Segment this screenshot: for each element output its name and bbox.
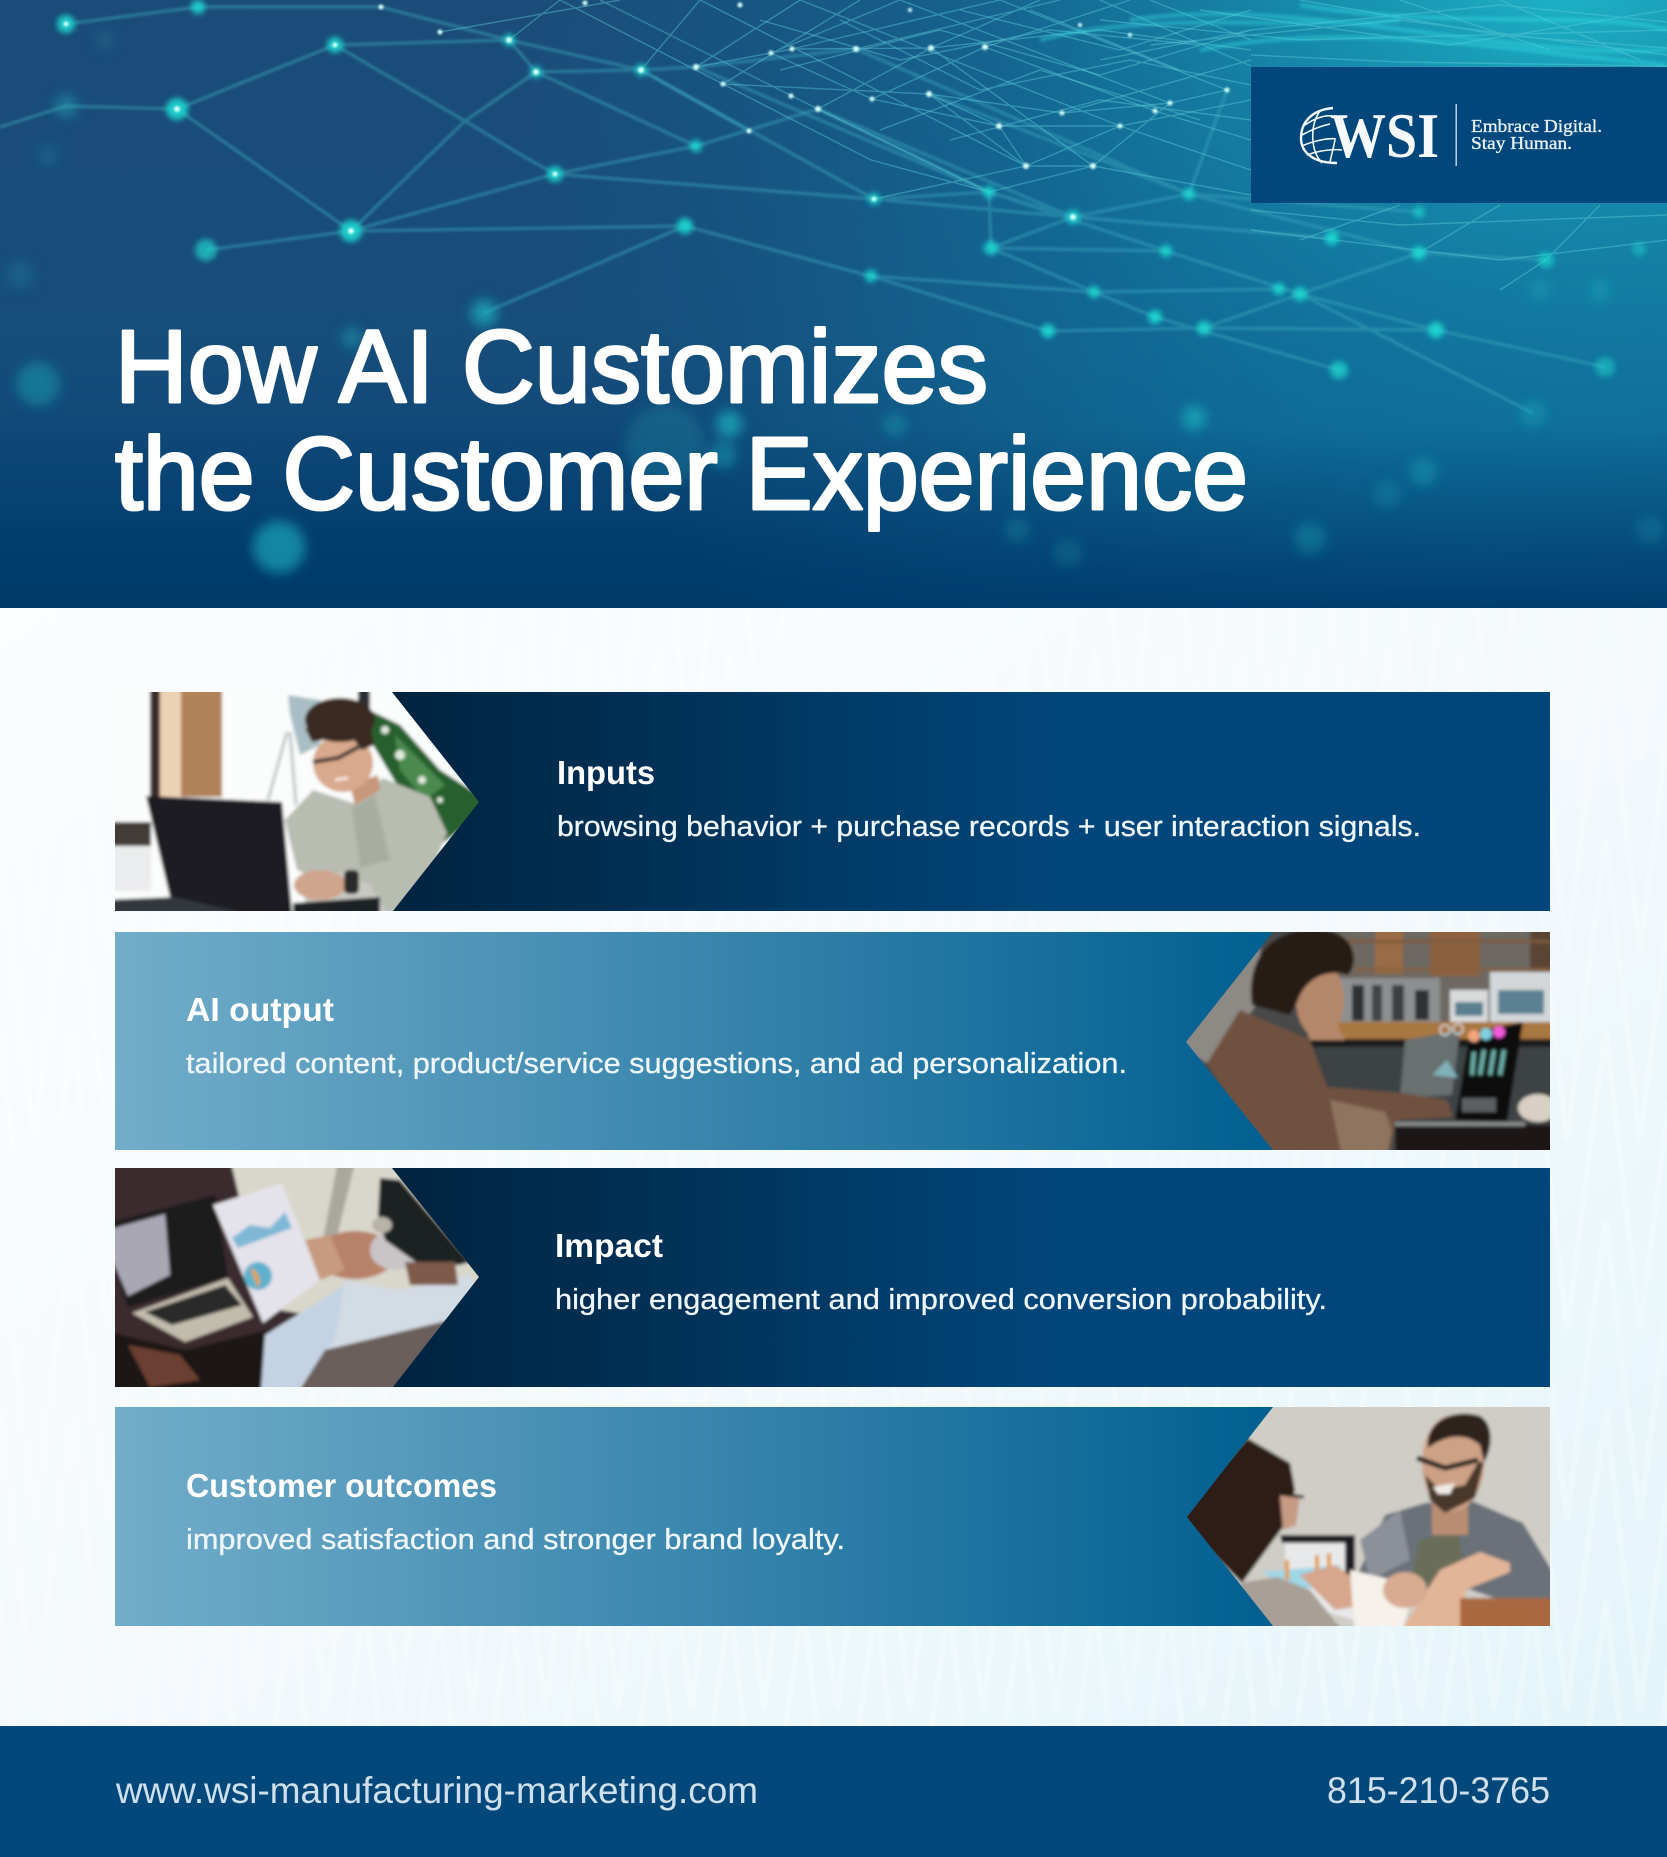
- panel: impact: [95, 1150, 1550, 1405]
- tagline: Embrace Digital.: [1471, 116, 1602, 136]
- heading: Inputs: [557, 754, 655, 791]
- photo: man with data dashboard: [1186, 932, 1550, 1150]
- blurred bokeh nodes: [6, 30, 1664, 573]
- phone: 815-210-3765: [1327, 1770, 1550, 1811]
- title: [115, 309, 1248, 531]
- website: www.wsi-manufacturing-marketing.com: [115, 1770, 758, 1811]
- footer: [0, 1726, 1667, 1857]
- heading: Impact: [555, 1227, 663, 1264]
- body text: improved satisfaction and stronger brand loyalty.: [186, 1524, 845, 1556]
- photo: man at laptop: [115, 692, 479, 911]
- photo: man on phone with report: [115, 1168, 479, 1387]
- header banner with network background: [0, 0, 1667, 608]
- panel: customer outcomes: [115, 1390, 1570, 1645]
- logo box: Stay Human.: [1471, 133, 1572, 153]
- fine mesh: [440, 0, 1667, 290]
- body text: higher engagement and improved conversion probability.: [555, 1284, 1327, 1316]
- title: How AI Customizes: [115, 309, 988, 424]
- page background: [0, 608, 1667, 1726]
- photo: consultant with client: [1187, 1407, 1550, 1626]
- logo box: [1251, 67, 1667, 203]
- network lines: [0, 7, 1605, 413]
- icon: WSI globe: [1301, 108, 1342, 163]
- panel: inputs: [95, 672, 1550, 931]
- white node cores: [64, 0, 1230, 234]
- title: the Customer Experience: [115, 416, 1248, 531]
- body text: browsing behavior + purchase records + user interaction signals.: [557, 811, 1421, 843]
- body text: tailored content, product/service suggestions, and ad personalization.: [186, 1048, 1127, 1080]
- top-right bright strands: [1040, 5, 1667, 65]
- sharp glowing nodes: [57, 0, 1646, 379]
- panel: AI output: [115, 915, 1570, 1170]
- WSI wordmark: WSI: [1330, 100, 1439, 171]
- heading: Customer outcomes: [186, 1467, 497, 1504]
- heading: AI output: [186, 991, 334, 1028]
